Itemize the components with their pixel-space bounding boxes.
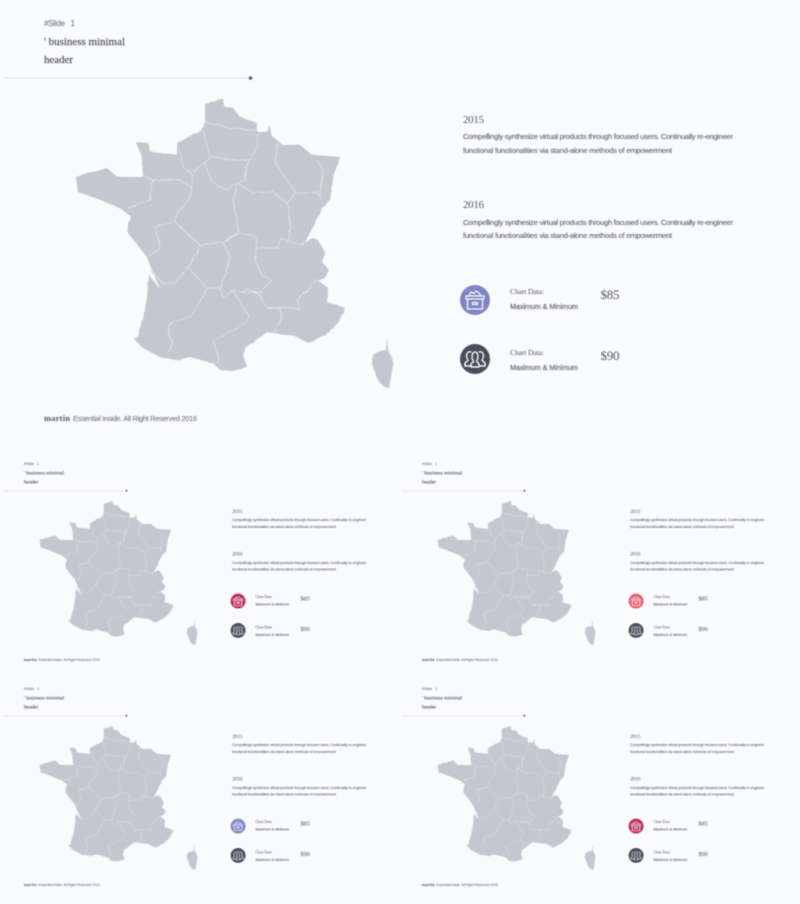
text block 2016 bbox=[463, 199, 733, 240]
text block 2015: 2015 bbox=[232, 509, 243, 515]
text block 2016: functional functionalities via stand-alone methods of empowerment bbox=[630, 567, 735, 571]
data row 2 bbox=[255, 625, 310, 637]
footer: Essential Inside. All Right Reserved 2016 bbox=[436, 658, 498, 662]
slide number: #Slide 1 bbox=[422, 461, 438, 466]
slide title: ' business minimal bbox=[422, 695, 463, 701]
icon: box bbox=[460, 285, 490, 315]
slide number: #Slide 1 bbox=[422, 686, 438, 691]
data row 2 bbox=[510, 348, 620, 372]
footer: martin bbox=[422, 657, 435, 662]
slide title bbox=[422, 695, 463, 710]
icon: people bbox=[231, 848, 246, 863]
slide title: ' business minimal bbox=[44, 36, 125, 48]
data row 1: $85 bbox=[300, 821, 310, 828]
slide 5: crimson accent bbox=[402, 686, 765, 887]
data row 1 bbox=[255, 595, 310, 607]
slide number: #Slide 1 bbox=[44, 19, 76, 28]
slide title bbox=[24, 695, 65, 710]
text block 2016: 2016 bbox=[630, 776, 641, 782]
slide 1: main bbox=[4, 19, 733, 423]
slide title: ' business minimal bbox=[422, 470, 463, 476]
icon: box bbox=[629, 594, 644, 609]
header rule with dot bbox=[402, 490, 525, 492]
data row 2 bbox=[653, 850, 708, 862]
header rule with dot bbox=[402, 715, 525, 717]
data row 1: $85 bbox=[600, 287, 620, 302]
data row 2: Chart Data: bbox=[255, 625, 272, 629]
data row 2: Chart Data: bbox=[653, 850, 670, 854]
slide title: header bbox=[24, 704, 38, 710]
icon: box bbox=[231, 819, 246, 834]
text block 2016 bbox=[232, 551, 367, 571]
text block 2016: functional functionalities via stand-alone methods of empowerment bbox=[463, 231, 673, 240]
slide title bbox=[24, 470, 65, 485]
data row 1: Chart Data: bbox=[653, 820, 670, 824]
map of France bbox=[40, 726, 197, 870]
text block 2015: Compellingly synthesize virtual products through focused users. Continually re-engineer bbox=[463, 132, 733, 141]
slide 4: periwinkle accent bbox=[4, 686, 367, 887]
footer: Essential Inside. All Right Reserved 2016 bbox=[38, 883, 100, 887]
slide title: header bbox=[422, 479, 436, 485]
data row 1 bbox=[653, 595, 708, 607]
data row 1: $85 bbox=[698, 596, 708, 603]
text block 2015: Compellingly synthesize virtual products through focused users. Continually re-engineer bbox=[232, 518, 367, 522]
data row 2: Maximum & Minimum bbox=[255, 633, 289, 637]
footer: Essential Inside. All Right Reserved 2016 bbox=[436, 883, 498, 887]
text block 2015 bbox=[463, 114, 733, 155]
text block 2015 bbox=[630, 509, 765, 529]
data row 2: $90 bbox=[698, 626, 708, 633]
text block 2016: Compellingly synthesize virtual products through focused users. Continually re-engineer bbox=[630, 786, 765, 790]
map of France bbox=[76, 99, 393, 388]
slide title: ' business minimal bbox=[24, 470, 65, 476]
icon: people bbox=[629, 848, 644, 863]
data row 1: Maximum & Minimum bbox=[653, 603, 687, 607]
text block 2016: 2016 bbox=[630, 551, 641, 557]
text block 2016: 2016 bbox=[232, 551, 243, 557]
text block 2016: functional functionalities via stand-alone methods of empowerment bbox=[630, 792, 735, 796]
footer bbox=[24, 882, 100, 887]
text block 2015: 2015 bbox=[463, 114, 484, 126]
text block 2015: Compellingly synthesize virtual products through focused users. Continually re-engineer bbox=[630, 743, 765, 747]
slide title: ' business minimal bbox=[24, 695, 65, 701]
text block 2015: functional functionalities via stand-alone methods of empowerment bbox=[630, 525, 735, 529]
data row 2: Maximum & Minimum bbox=[653, 858, 687, 862]
data row 1: Chart Data: bbox=[255, 820, 272, 824]
text block 2015: functional functionalities via stand-alone methods of empowerment bbox=[232, 750, 337, 754]
header rule with dot bbox=[4, 490, 127, 492]
slide title bbox=[44, 36, 125, 66]
slide 2: crimson accent bbox=[4, 461, 367, 662]
data row 2: Maximum & Minimum bbox=[510, 363, 578, 372]
footer: Essential Inside. All Right Reserved 2016 bbox=[73, 414, 197, 423]
footer: martin bbox=[44, 413, 70, 423]
data row 1 bbox=[255, 820, 310, 832]
icon: box bbox=[231, 594, 246, 609]
data row 1: Chart Data: bbox=[255, 595, 272, 599]
data row 2 bbox=[255, 850, 310, 862]
text block 2016: Compellingly synthesize virtual products through focused users. Continually re-engineer bbox=[463, 218, 733, 227]
slide title: header bbox=[24, 479, 38, 485]
data row 2: Chart Data: bbox=[255, 850, 272, 854]
text block 2015: functional functionalities via stand-alone methods of empowerment bbox=[463, 146, 673, 155]
text block 2016: 2016 bbox=[232, 776, 243, 782]
text block 2016: Compellingly synthesize virtual products through focused users. Continually re-engineer bbox=[630, 561, 765, 565]
text block 2016: functional functionalities via stand-alone methods of empowerment bbox=[232, 792, 337, 796]
data row 1: Maximum & Minimum bbox=[510, 302, 578, 311]
footer: martin bbox=[24, 882, 37, 887]
slide title: header bbox=[422, 704, 436, 710]
footer bbox=[422, 882, 498, 887]
data row 1: Chart Data: bbox=[510, 287, 544, 296]
data row 2: Chart Data: bbox=[653, 625, 670, 629]
data row 2: Chart Data: bbox=[510, 348, 544, 357]
footer: martin bbox=[24, 657, 37, 662]
slide number: #Slide 1 bbox=[24, 686, 40, 691]
header rule with dot bbox=[4, 715, 127, 717]
data row 2: $90 bbox=[600, 348, 620, 363]
data row 1: Chart Data: bbox=[653, 595, 670, 599]
map of France bbox=[438, 726, 595, 870]
footer: martin bbox=[422, 882, 435, 887]
text block 2015 bbox=[232, 734, 367, 754]
data row 2: Maximum & Minimum bbox=[653, 633, 687, 637]
text block 2015: 2015 bbox=[630, 734, 641, 740]
data row 1 bbox=[653, 820, 708, 832]
text block 2016: functional functionalities via stand-alone methods of empowerment bbox=[232, 567, 337, 571]
text block 2015: 2015 bbox=[630, 509, 641, 515]
header rule with dot bbox=[4, 76, 252, 80]
data row 2: $90 bbox=[300, 851, 310, 858]
data row 1: $85 bbox=[300, 596, 310, 603]
map of France bbox=[438, 501, 595, 645]
footer bbox=[422, 657, 498, 662]
text block 2016 bbox=[630, 551, 765, 571]
text block 2015: 2015 bbox=[232, 734, 243, 740]
data row 1: Maximum & Minimum bbox=[653, 828, 687, 832]
icon: people bbox=[231, 623, 246, 638]
data row 1: Maximum & Minimum bbox=[255, 603, 289, 607]
text block 2015: functional functionalities via stand-alone methods of empowerment bbox=[630, 750, 735, 754]
icon: people bbox=[460, 344, 490, 374]
text block 2015: functional functionalities via stand-alone methods of empowerment bbox=[232, 525, 337, 529]
data row 1 bbox=[510, 287, 620, 311]
slide 3: coral accent bbox=[402, 461, 765, 662]
text block 2016: 2016 bbox=[463, 199, 484, 211]
text block 2016: Compellingly synthesize virtual products through focused users. Continually re-engineer bbox=[232, 786, 367, 790]
text block 2015: Compellingly synthesize virtual products through focused users. Continually re-engineer bbox=[630, 518, 765, 522]
text block 2015: Compellingly synthesize virtual products through focused users. Continually re-engineer bbox=[232, 743, 367, 747]
map of France bbox=[40, 501, 197, 645]
slide number: #Slide 2 bbox=[24, 461, 39, 466]
icon: box bbox=[629, 819, 644, 834]
data row 1: $85 bbox=[698, 821, 708, 828]
data row 2 bbox=[653, 625, 708, 637]
icon: people bbox=[629, 623, 644, 638]
data row 2: Maximum & Minimum bbox=[255, 858, 289, 862]
footer bbox=[24, 657, 100, 662]
text block 2016 bbox=[232, 776, 367, 796]
slide title bbox=[422, 470, 463, 485]
data row 2: $90 bbox=[300, 626, 310, 633]
text block 2016: Compellingly synthesize virtual products through focused users. Continually re-engineer bbox=[232, 561, 367, 565]
footer: Essential Inside. All Right Reserved 2016 bbox=[38, 658, 100, 662]
slide title: header bbox=[44, 54, 73, 66]
text block 2016 bbox=[630, 776, 765, 796]
text block 2015 bbox=[630, 734, 765, 754]
text block 2015 bbox=[232, 509, 367, 529]
data row 1: Maximum & Minimum bbox=[255, 828, 289, 832]
data row 2: $90 bbox=[698, 851, 708, 858]
